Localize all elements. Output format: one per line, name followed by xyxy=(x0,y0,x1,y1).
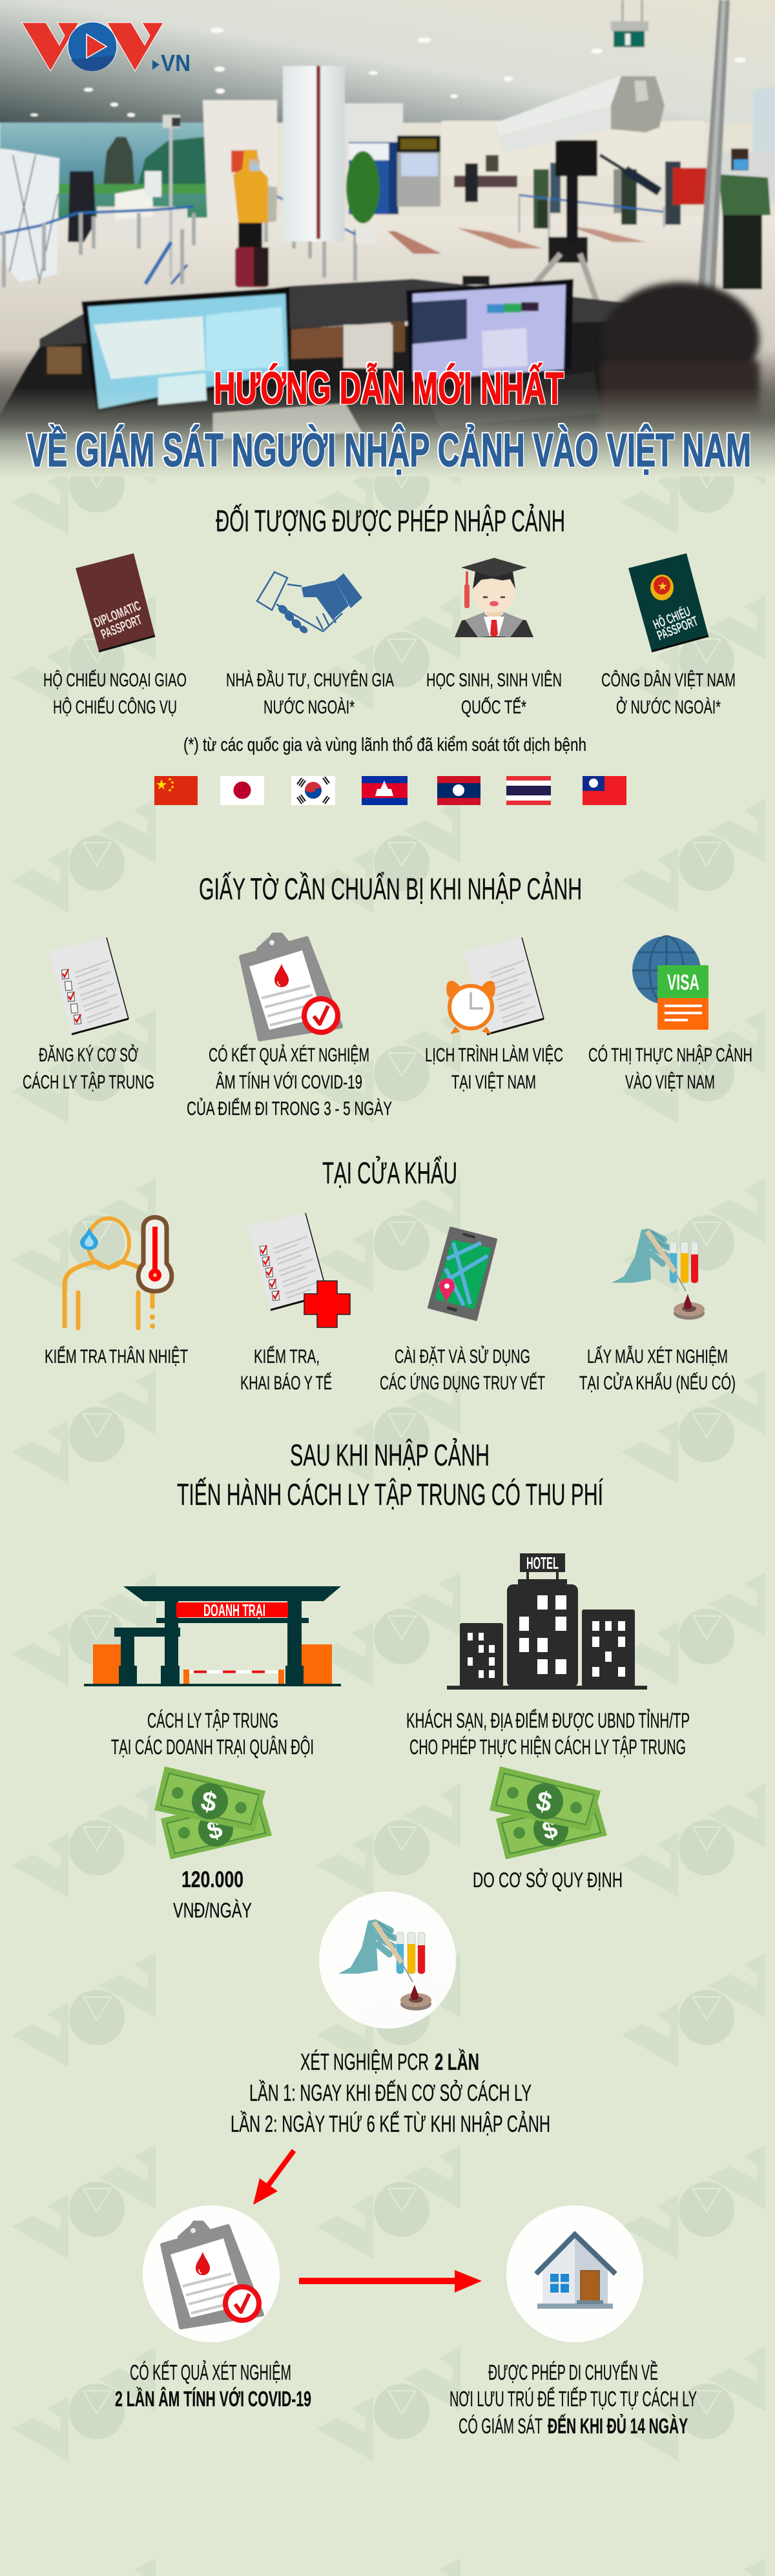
icon: military camp gate xyxy=(84,1586,341,1686)
label: students xyxy=(426,670,562,718)
label: continue self-isolation: ĐẾN KHI ĐỦ 14 NGÀY xyxy=(548,2414,688,2438)
flags row xyxy=(154,776,626,805)
panel: required documents xyxy=(23,872,752,1119)
text: PCR test schedule: LẦN 2: NGÀY THỨ 6 KỂ TỪ KHI NHẬP CẢNH xyxy=(231,2110,550,2137)
label: diplomatic passport: HỘ CHIẾU NGOẠI GIAO xyxy=(43,669,187,691)
label: declaration: KHAI BÁO Y TẾ xyxy=(240,1372,332,1394)
label: apps: CÁC ỨNG DỤNG TRUY VẾT xyxy=(380,1372,545,1394)
icon: hotel buildings xyxy=(447,1553,647,1690)
flag: Thailand xyxy=(506,776,551,805)
icon: graduate xyxy=(455,558,533,637)
label: military camps: CÁCH LY TẬP TRUNG xyxy=(147,1709,278,1732)
label: continue self-isolation: CÓ GIÁM SÁT xyxy=(459,2414,542,2438)
label: negative test xyxy=(187,1044,392,1119)
icon: diplomatic passport xyxy=(76,553,155,651)
text: PCR test schedule: 2 LẦN xyxy=(435,2049,479,2075)
footnote: (*) từ các quốc gia và vùng lãnh thổ đã kiểm soát tốt dịch bệnh xyxy=(183,735,586,755)
label: negative test: ÂM TÍNH VỚI COVID-19 xyxy=(216,1072,362,1093)
label: students: HỌC SINH, SINH VIÊN xyxy=(426,670,562,691)
icon: medical declaration xyxy=(247,1213,350,1327)
price: military camps xyxy=(173,1867,252,1922)
label: schedule: TẠI VIỆT NAM xyxy=(451,1072,536,1093)
panel: after entry xyxy=(84,1438,690,1922)
heading: SAU KHI NHẬP CẢNH xyxy=(290,1438,490,1472)
label: schedule: LỊCH TRÌNH LÀM VIỆC xyxy=(425,1045,563,1066)
circle: home xyxy=(506,2205,643,2342)
arrow: horizontal xyxy=(299,2270,482,2293)
icon: checklist xyxy=(48,937,129,1034)
label: military camps: TẠI CÁC DOANH TRẠI QUÂN ĐỘI xyxy=(111,1735,314,1759)
arrow: diagonal xyxy=(253,2151,294,2205)
text: PCR test schedule: XÉT NGHIỆM PCR xyxy=(300,2049,429,2075)
flag: Japan xyxy=(220,776,264,805)
circle: negative result xyxy=(143,2205,280,2342)
heading: TẠI CỬA KHẨU xyxy=(322,1156,457,1190)
label: investors: NƯỚC NGOÀI* xyxy=(264,697,355,718)
label: sampling xyxy=(579,1345,736,1394)
flag: Taiwan xyxy=(583,776,626,805)
label: register quarantine: ĐĂNG KÝ CƠ SỞ xyxy=(39,1044,138,1066)
VOV.VN logo xyxy=(22,22,191,76)
label: register quarantine: CÁCH LY TẬP TRUNG xyxy=(23,1072,154,1093)
label: schedule xyxy=(425,1045,563,1093)
label: declaration xyxy=(240,1345,332,1394)
label: apps xyxy=(380,1345,545,1394)
icon: tracing app phone xyxy=(429,1228,496,1320)
icon: diplomatic passport: PASSPORT xyxy=(99,613,144,642)
flag: Cambodia xyxy=(362,776,408,805)
heading: ĐỐI TƯỢNG ĐƯỢC PHÉP NHẬP CẢNH xyxy=(216,504,565,538)
text: PCR test schedule: LẦN 1: NGAY KHI ĐẾN CƠ SỞ CÁCH LY xyxy=(249,2079,532,2106)
circle: lab icon xyxy=(319,1892,456,2029)
icon: hotel buildings: HOTEL xyxy=(526,1553,559,1573)
icon: Vietnamese passport: ★ xyxy=(657,580,668,593)
icon: Vietnamese passport: PASSPORT xyxy=(655,614,700,644)
title line 1: HƯỚNG DẪN MỚI NHẤT xyxy=(214,362,564,413)
price: hotels: DO CƠ SỞ QUY ĐỊNH xyxy=(473,1868,623,1892)
flag: Laos xyxy=(437,776,480,805)
icon: alarm clock with document xyxy=(446,937,544,1034)
flag: China xyxy=(154,776,198,805)
label: two negative tests: 2 LẦN ÂM TÍNH VỚI COVID-19 xyxy=(115,2387,311,2411)
text: PCR test schedule xyxy=(231,2049,550,2137)
label: diplomatic passport xyxy=(43,669,187,718)
label: military camps xyxy=(111,1709,314,1759)
label: overseas citizens: Ở NƯỚC NGOÀI* xyxy=(616,696,721,718)
label: visa xyxy=(588,1044,752,1093)
label: two negative tests: CÓ KẾT QUẢ XÉT NGHIỆM xyxy=(130,2360,291,2384)
icon: military camp gate: DOANH TRẠI xyxy=(203,1600,265,1620)
icon: Vietnamese passport: HỘ CHIẾU xyxy=(651,604,693,633)
label: continue self-isolation xyxy=(450,2360,697,2438)
icon: temperature check xyxy=(65,1218,172,1329)
icon: visa xyxy=(632,936,708,1030)
label: negative test: CỦA ĐIỂM ĐI TRONG 3 - 5 NGÀY xyxy=(187,1098,392,1119)
label: declaration: KIỂM TRA, xyxy=(254,1345,320,1367)
panel: eligible entrants xyxy=(43,504,736,805)
label: overseas citizens xyxy=(601,669,736,718)
icon: clipboard blood test xyxy=(241,934,341,1039)
label: visa: VÀO VIỆT NAM xyxy=(625,1072,715,1093)
icon: Vietnamese passport xyxy=(628,553,708,651)
price: military camps: 120.000 xyxy=(181,1867,243,1892)
label: investors xyxy=(226,669,394,718)
icon: money right xyxy=(490,1766,607,1859)
panel: at the border xyxy=(45,1156,736,1394)
icon: visa: VISA xyxy=(667,970,699,995)
label: two negative tests xyxy=(115,2360,311,2411)
icon: house xyxy=(536,2234,615,2309)
VOV.VN logo: VN xyxy=(161,50,191,76)
label: apps: CÀI ĐẶT VÀ SỬ DỤNG xyxy=(395,1345,530,1367)
label: continue self-isolation: ĐƯỢC PHÉP DI CHUYỂN VỀ xyxy=(488,2360,658,2384)
icon: diplomatic passport: DIPLOMATIC xyxy=(92,598,143,631)
heading xyxy=(177,1438,603,1511)
label: hotels xyxy=(406,1709,690,1759)
panel: PCR testing flow xyxy=(115,1892,697,2438)
icon: lab sampling xyxy=(612,1229,705,1320)
label: diplomatic passport: HỘ CHIẾU CÔNG VỤ xyxy=(53,696,177,718)
label: temperature: KIỂM TRA THÂN NHIỆT xyxy=(45,1345,188,1367)
flag: South Korea xyxy=(291,776,335,805)
icon: money left xyxy=(154,1766,272,1859)
price: military camps: VNĐ/NGÀY xyxy=(173,1899,252,1922)
label: investors: NHÀ ĐẦU TƯ, CHUYÊN GIA xyxy=(226,669,394,691)
label: negative test: CÓ KẾT QUẢ XÉT NGHIỆM xyxy=(209,1044,369,1066)
label: register quarantine xyxy=(23,1044,154,1093)
icon: handshake xyxy=(257,572,362,635)
header photo: airport thermal screening xyxy=(0,0,775,487)
label: students: QUỐC TẾ* xyxy=(461,696,526,718)
